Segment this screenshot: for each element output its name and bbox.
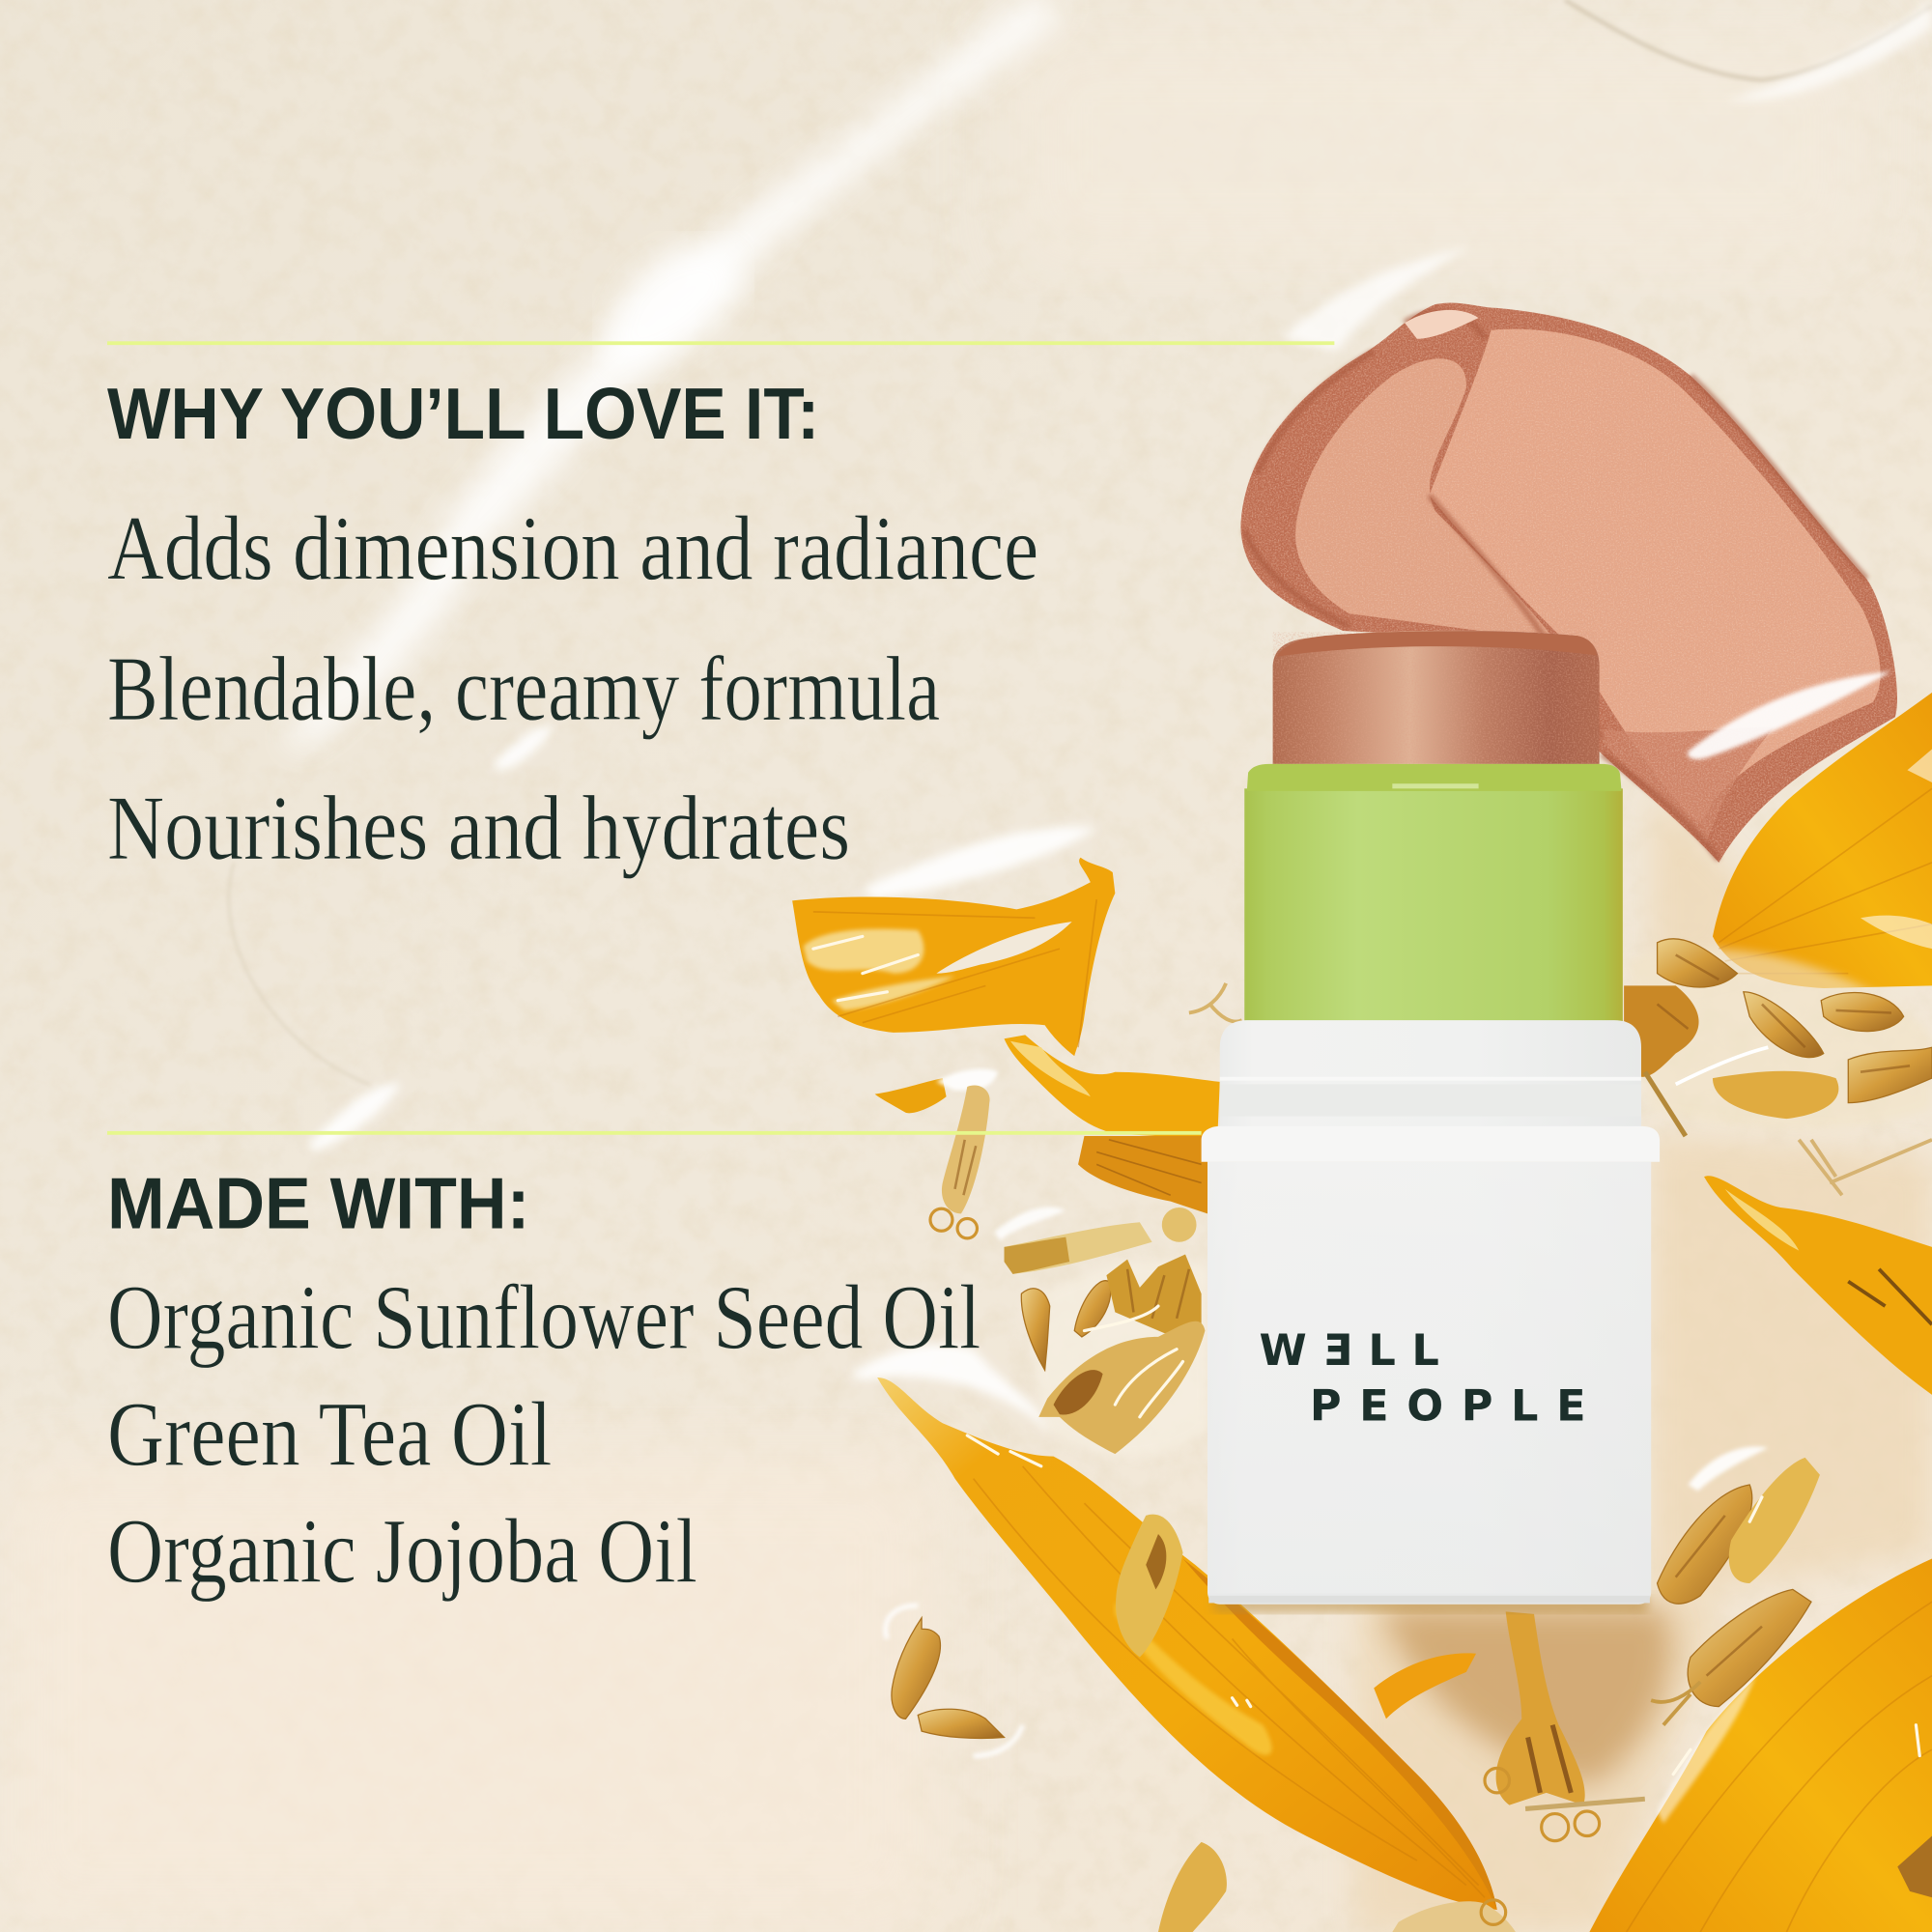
green tube bbox=[1244, 788, 1623, 1021]
oil halo bbox=[1627, 949, 1932, 1130]
seed end bbox=[1848, 1047, 1932, 1103]
oil highlight top right bbox=[1725, 0, 1932, 101]
ingredients list bbox=[107, 1265, 980, 1603]
swatch: shadow ridges bbox=[1244, 312, 1866, 860]
oil edge top right bbox=[1565, 0, 1932, 80]
neck ridge bbox=[1220, 1084, 1641, 1117]
petal highlight tip bbox=[1010, 1041, 1091, 1096]
oil highlight: long diagonal streak bbox=[283, 0, 1072, 752]
logo bbox=[1260, 1325, 1586, 1432]
oil highlight: secondary glow bbox=[606, 243, 741, 371]
white neck bbox=[1220, 1020, 1641, 1128]
green rim highlight bbox=[1392, 783, 1479, 788]
seed on petal bbox=[1116, 1515, 1182, 1658]
body shading overlay bbox=[1208, 1162, 1651, 1593]
white body bbox=[1208, 1162, 1651, 1605]
green rim bbox=[1247, 764, 1622, 791]
copper glitter bbox=[1273, 632, 1600, 764]
white base rim bbox=[1202, 1126, 1660, 1162]
stem bbox=[1645, 1072, 1686, 1136]
oil ring bbox=[886, 1605, 1023, 1756]
seed: bottom bbox=[1158, 1842, 1227, 1932]
neck ridge line bbox=[1220, 1077, 1641, 1081]
copper top rim bbox=[1276, 631, 1597, 657]
petal: mid behind cap bbox=[1005, 1035, 1220, 1242]
petal: right upper bbox=[1713, 693, 1932, 988]
swatch: upper right smear bbox=[1430, 329, 1881, 822]
oil highlight bbox=[994, 1208, 1065, 1240]
swatch: dark glitter bbox=[1233, 296, 1910, 863]
seeds: small pair left bbox=[886, 1605, 1023, 1756]
petal glossy reflection bbox=[1861, 750, 1932, 949]
long seed brown tip bbox=[1005, 1237, 1069, 1274]
petal sheen bbox=[1725, 1189, 1799, 1251]
rule bottom bbox=[107, 1131, 1202, 1135]
petal gap bbox=[936, 922, 1072, 974]
oil halo bbox=[1023, 1261, 1208, 1457]
petal lower veins bbox=[1096, 1140, 1202, 1195]
brown shadow below product bbox=[1380, 1608, 1671, 1786]
benefits list bbox=[107, 497, 1038, 879]
rule top bbox=[107, 341, 1334, 345]
seed: bottom center bbox=[1485, 1611, 1645, 1841]
swatch of highlighter bbox=[1233, 296, 1910, 863]
dried seed cluster by cap bbox=[994, 1208, 1208, 1457]
petal: large bottom bbox=[877, 1378, 1497, 1910]
seed: right edge bottom bbox=[1897, 1836, 1932, 1897]
oil highlight over small sliver bbox=[936, 1069, 998, 1091]
ingredients list: Green Tea Oil bbox=[107, 1383, 552, 1486]
petal: bottom right bbox=[1589, 1559, 1932, 1932]
petal dark edge bbox=[1182, 1559, 1497, 1910]
seed: long gold seed by rule bbox=[930, 1086, 990, 1238]
ingredients list: Organic Sunflower Seed Oil bbox=[107, 1265, 980, 1368]
petal glints bbox=[1673, 1725, 1919, 1775]
seed curls bottom bbox=[1392, 1900, 1516, 1932]
petal sheen bbox=[804, 929, 955, 1010]
petal glints bbox=[967, 1435, 1251, 1707]
petal: right mid bbox=[1704, 1176, 1932, 1395]
seed ball bbox=[1162, 1208, 1197, 1242]
petal sheen bbox=[1658, 1676, 1756, 1824]
swatch: top shine bbox=[1405, 310, 1479, 339]
white highlights bbox=[1676, 1047, 1768, 1084]
petal veins bbox=[974, 1466, 1485, 1897]
benefits list: Blendable, creamy formula bbox=[107, 638, 940, 740]
logo: WƎLL bbox=[1260, 1325, 1439, 1376]
body bottom edge bbox=[1208, 1596, 1650, 1603]
petal tuft bbox=[1106, 1254, 1202, 1337]
petal: small sliver bbox=[875, 1078, 947, 1113]
product: stick bbox=[1202, 631, 1660, 1613]
tuft lines bbox=[1127, 1269, 1189, 1319]
petal veins bbox=[813, 899, 1096, 1047]
small seed 2 bbox=[1074, 1281, 1111, 1337]
oil highlight near swatch bbox=[1282, 246, 1472, 352]
product shadow bbox=[1213, 1596, 1647, 1613]
oil pool outline bbox=[229, 863, 370, 1084]
small curl left of green cap bbox=[1189, 983, 1242, 1022]
ingredients list: Organic Jojoba Oil bbox=[107, 1500, 697, 1603]
swatch: oil highlight bbox=[1688, 671, 1891, 759]
bundle brown accent bbox=[1054, 1370, 1103, 1415]
copper bullet bbox=[1273, 631, 1600, 764]
long seed bbox=[1005, 1222, 1152, 1274]
petal highlight band bbox=[1115, 1602, 1272, 1755]
petal veins bbox=[1627, 1602, 1932, 1932]
heading: made with: MADE WITH: bbox=[107, 1163, 529, 1244]
oil highlight bbox=[1688, 1446, 1768, 1491]
seed brown bbox=[1146, 1534, 1166, 1589]
translucent seed bbox=[1713, 1071, 1838, 1119]
petal: behind stick bottom bbox=[1374, 1653, 1476, 1719]
dark seed lines bbox=[1658, 955, 1910, 1072]
benefits list: Nourishes and hydrates bbox=[107, 777, 850, 879]
swatch: lower left smear bbox=[1295, 358, 1555, 640]
seed cluster: right of stick bbox=[1624, 939, 1932, 1195]
heading: why you'll love it: WHY YOU’LL LOVE IT: bbox=[107, 373, 819, 454]
oil highlight small drops bbox=[308, 725, 1096, 1435]
small seed bbox=[1021, 1289, 1050, 1370]
petal: upper middle bbox=[792, 858, 1115, 1056]
logo: PEOPLE bbox=[1310, 1381, 1586, 1432]
swatch: lower tail tone bbox=[1589, 727, 1775, 844]
petal lower portion bbox=[1078, 1136, 1208, 1213]
warm glow around product bbox=[1355, 788, 1932, 1932]
bundle highlights bbox=[1084, 1306, 1182, 1417]
benefits list: Adds dimension and radiance bbox=[107, 497, 1038, 599]
stamen fork bbox=[1799, 1140, 1932, 1195]
main seed bundle bbox=[1038, 1321, 1205, 1454]
seed cluster: lower right bbox=[1651, 1446, 1820, 1725]
petal glints bbox=[813, 936, 918, 1001]
swatch: light glitter bbox=[1233, 296, 1910, 863]
